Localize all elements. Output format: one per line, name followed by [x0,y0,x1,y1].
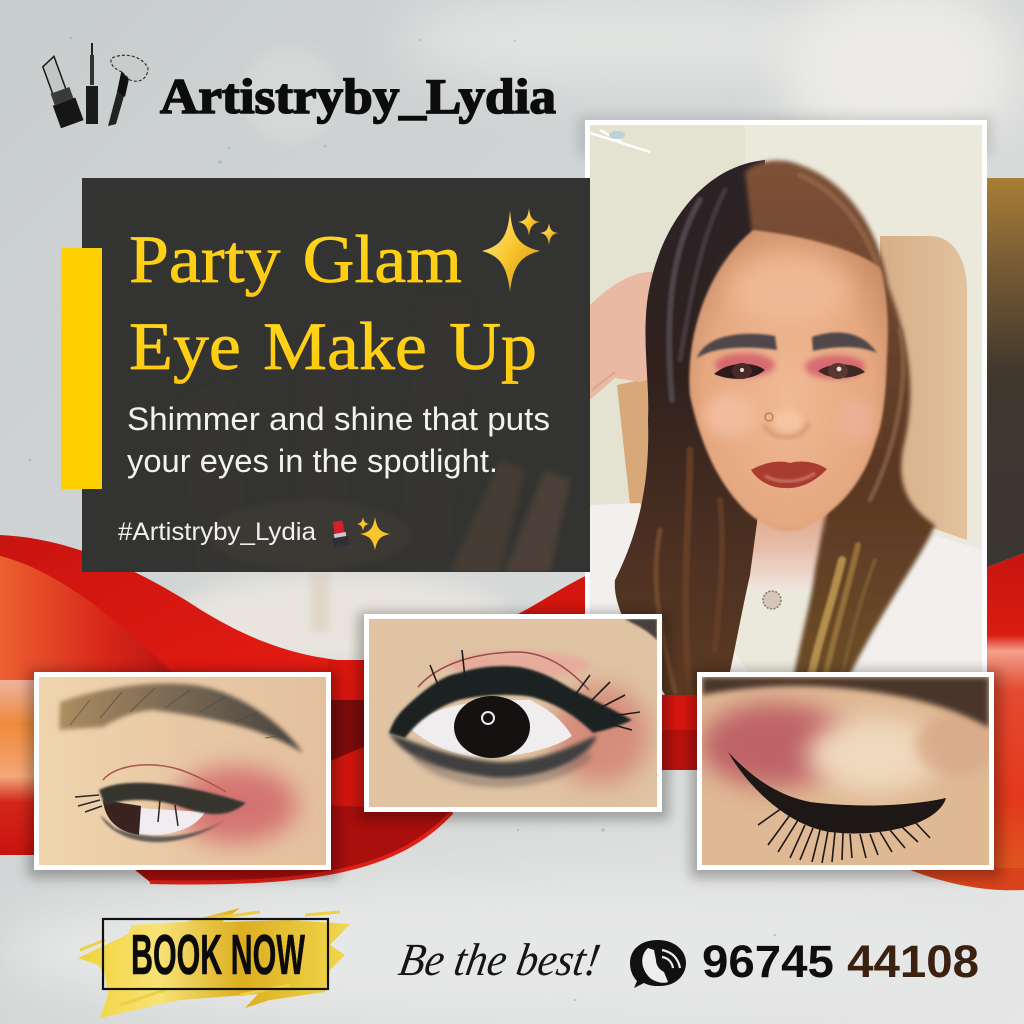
eye photo: middle [358,612,669,820]
smoky lid [99,783,246,814]
white top [590,503,982,695]
frame [364,614,662,812]
wing liner [728,752,946,833]
right dark side panel [985,178,1024,568]
icon: gold sparkles [482,208,558,292]
catchlight [482,712,494,724]
hair, right brown [745,160,935,695]
frame [697,672,994,870]
chair left [617,380,648,505]
wall [734,125,982,672]
brow [702,677,989,728]
ribbon: gap between photos [660,692,700,770]
portrait photo [590,125,982,695]
ribbon: behind portrait, left [518,573,592,616]
arm and hand [590,272,654,400]
gold shimmer [807,717,943,793]
ribbon: left edge stripes [0,680,36,855]
eyebrows [697,334,777,358]
logo icons [37,43,148,128]
eye white [410,700,572,757]
ribbon: middle section [130,660,452,883]
icon: sparkles emoji [357,517,390,550]
eye photo: left [28,670,338,878]
subtitle [127,401,550,479]
lashes [75,795,178,826]
tagline: Be the best! [395,935,604,986]
ribbon: right edge [985,553,1024,880]
portrait photo frame [578,116,992,695]
yellow accent bar [61,248,102,489]
necklace [763,591,781,609]
red ribbon [0,535,1024,890]
lashes [758,808,930,863]
pink shadow [173,767,297,843]
lashes [430,650,640,730]
icon: lipstick [330,520,350,547]
pink eye shadow [715,353,775,377]
upper lid band [389,666,632,738]
iris [454,696,530,758]
icon: phone in chat bubble [630,940,686,988]
lips [751,461,827,488]
subtitle line 1: Shimmer and shine that puts [127,401,550,437]
pink shadow [700,703,850,787]
ribbon: left orange body [0,556,176,690]
faint brush photo [213,462,570,572]
icon: lipstick [37,54,84,128]
frame border [585,120,987,693]
book now button [78,908,350,1018]
dark text panel [82,178,590,572]
button label: BOOK NOW [131,923,305,987]
eye white [138,808,205,835]
title line 2: Eye Make Up [129,308,537,384]
icon: mascara wand [86,43,98,124]
button frame [103,919,328,989]
eyes [714,364,765,379]
crease line [418,652,589,690]
brow [59,684,303,753]
nose [764,422,808,437]
subtitle line 2: your eyes in the spotlight. [127,443,498,479]
title line 1: Party Glam [129,221,462,297]
face [689,230,888,531]
chair right [880,236,967,540]
gold brush stroke [78,908,350,1018]
eye photo: right [691,670,1001,878]
neck [748,514,825,586]
crease line [103,765,226,792]
brand name: Artistryby_Lydia [160,68,556,124]
lower liner [389,733,597,778]
iris [103,800,141,835]
hashtag: #Artistryby_Lydia [118,518,316,546]
hair, back [615,160,765,695]
frame [34,672,331,870]
hair strands [656,175,903,692]
brush streaks [80,912,340,1005]
ribbon: upper band [0,535,366,700]
icon: powder brush [108,55,148,126]
ribbon: lower right tail [905,868,1024,890]
phone number: 96745 44108 [702,936,979,987]
